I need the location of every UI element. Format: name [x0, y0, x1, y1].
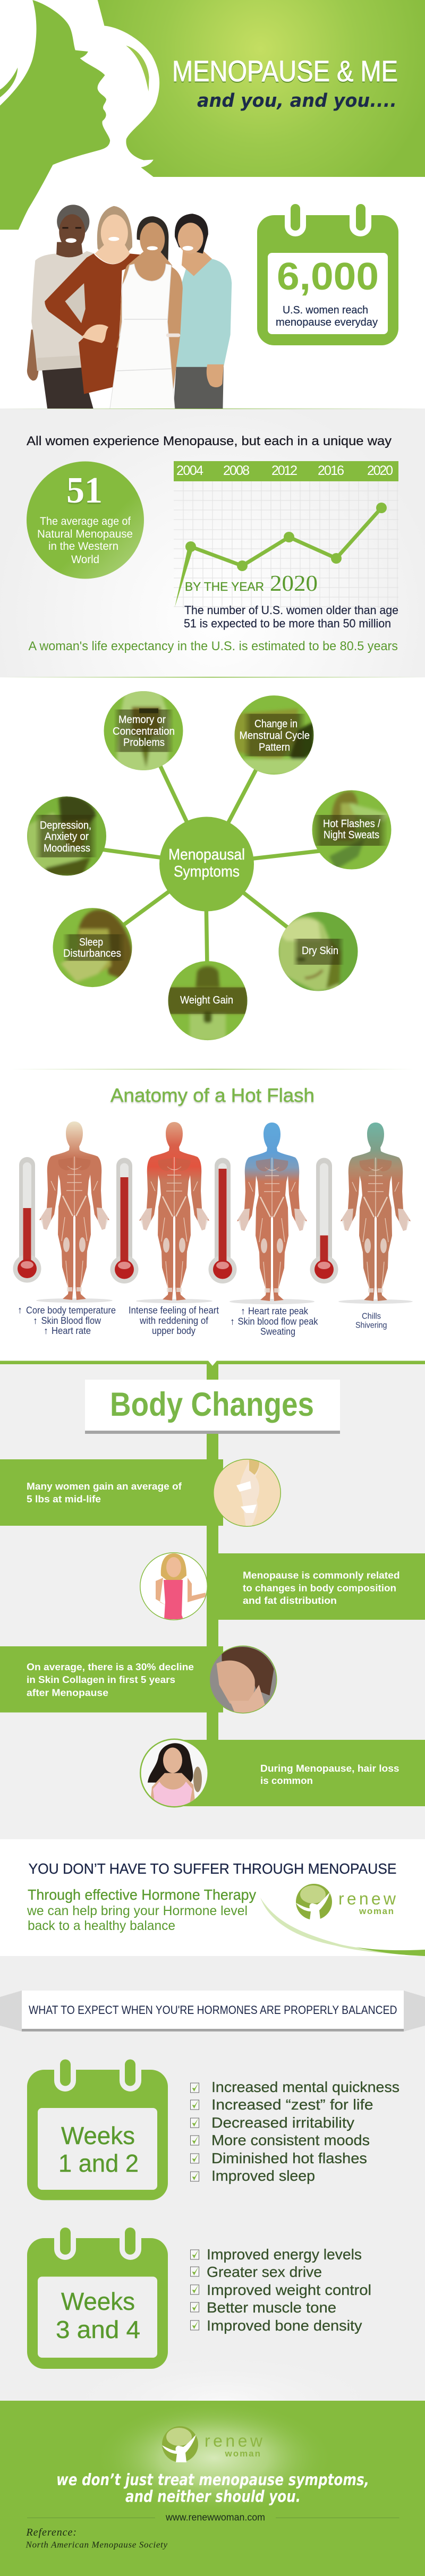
caption 3: Heart rate peak [248, 1306, 309, 1316]
checklist: weeks 3 and 4: Better muscle tone [207, 2299, 336, 2316]
change 4: hair loss [140, 1738, 425, 1807]
caption 2: with reddening of [139, 1315, 209, 1326]
closing tagline [56, 2471, 369, 2506]
panel: body changes [0, 1361, 425, 1839]
calendar: 6,000 [257, 204, 398, 345]
change 2: body composition: and fat distribution [243, 1595, 337, 1606]
caption 2: upper body [152, 1325, 196, 1336]
calendar: weeks 3 and 4: Weeks [61, 2288, 135, 2315]
white head silhouette [0, 0, 159, 177]
symptom: depression [27, 796, 106, 876]
therapy text: we can help bring your Hormone level [27, 1903, 248, 1918]
line chart [174, 461, 398, 608]
caption 3: ↑ [230, 1316, 235, 1327]
stat caption [276, 304, 378, 328]
change 3: collagen: after Menopause [27, 1687, 108, 1698]
symptom: memory: Concentration [113, 726, 175, 737]
checklist: weeks 3 and 4: Improved energy levels [207, 2246, 362, 2263]
symptom: menstrual cycle: Pattern [259, 742, 290, 753]
symptom: depression: Moodiness [44, 843, 90, 854]
heading box: Body Changes [110, 1386, 314, 1423]
symptom: depression: Anxiety or [45, 831, 89, 843]
figure 1 with thermometer [13, 1121, 109, 1300]
checklist: weeks 3 and 4 [190, 2246, 371, 2334]
heading: YOU DON’T HAVE TO SUFFER THROUGH MENOPAUSE [29, 1860, 396, 1877]
symptom: hot flashes: Night Sweats [324, 829, 379, 841]
logo: renew woman: woman [359, 1906, 394, 1916]
symptom: menstrual cycle [234, 695, 314, 775]
callout: by the year 2020: BY THE YEAR [185, 580, 264, 593]
closing tagline: and neither should you. [125, 2487, 301, 2506]
change 3: collagen: in Skin Collagen in first 5 years [27, 1674, 175, 1685]
circle: average age: Natural Menopause [37, 528, 133, 540]
change 2: body composition: to changes in body composition [243, 1583, 396, 1594]
line chart: 2004 [176, 463, 203, 478]
caption 2 [129, 1305, 219, 1336]
timeline stem [207, 1361, 218, 1740]
symptom: menstrual cycle: Menstrual Cycle [239, 730, 310, 742]
website with rules: www.renewwoman.com [165, 2512, 265, 2522]
change 4: hair loss: is common [260, 1775, 313, 1786]
symptom: dry skin: Dry Skin [302, 945, 338, 957]
reference: North American Menopause Society [26, 2539, 167, 2550]
line chart: 2020 [367, 463, 393, 478]
hub: Menopausal [168, 846, 245, 863]
footer [0, 2401, 425, 2576]
illustration: four women [27, 205, 232, 410]
hub [159, 817, 254, 912]
heading: All women experience Menopause, but each in a unique way [27, 434, 392, 448]
callout: by the year 2020: 51 is expected to be more than 50 million [184, 617, 391, 630]
symptom: memory [104, 688, 183, 773]
symptom: memory: Memory or [118, 714, 166, 726]
diagram: menopausal symptoms [27, 688, 391, 1041]
symptom: sleep: Sleep [79, 937, 103, 948]
stat number: 6,000 [277, 256, 379, 298]
symptom: weight gain: Weight Gain [180, 994, 233, 1006]
calendar: weeks 3 and 4: 3 and 4 [56, 2316, 140, 2343]
subtitle: and you, and you.... [197, 90, 397, 112]
life expectancy line: A woman's life expectancy in the U.S. is estimated to be 80.5 years [29, 639, 398, 653]
stat caption: U.S. women reach [283, 304, 368, 316]
checklist: weeks 1 and 2: Improved sleep [211, 2167, 315, 2184]
symptom: hot flashes: Hot Flashes / [323, 818, 380, 830]
logo: renew woman footer [162, 2426, 263, 2462]
swoosh [260, 1898, 425, 1956]
change 4: hair loss: During Menopause, hair loss [260, 1763, 400, 1774]
caption 2: Intense feeling of heart [129, 1305, 219, 1315]
reference [26, 2527, 167, 2550]
circle: average age: in the Western [48, 540, 118, 552]
caption 1: ↑ [33, 1315, 38, 1326]
therapy text: Through effective Hormone Therapy [28, 1886, 256, 1903]
reference: Reference: [26, 2527, 76, 2538]
heading box [85, 1380, 340, 1434]
circle: average age [27, 461, 144, 579]
ribbon heading [0, 1991, 425, 2031]
hair crescent [126, 46, 149, 91]
checklist: weeks 3 and 4: Improved weight control [207, 2282, 371, 2298]
symptom: depression: Depression, [40, 820, 91, 831]
change 3: collagen: On average, there is a 30% decline [27, 1662, 194, 1672]
calendar: weeks 1 and 2: 1 and 2 [58, 2149, 139, 2177]
symptom: dry skin [278, 912, 358, 991]
checklist: weeks 1 and 2: More consistent moods [211, 2132, 370, 2148]
woman 2 [45, 206, 144, 394]
caption 4 [355, 1312, 387, 1330]
panel: therapy message [27, 1860, 425, 1956]
circle: average age: 51 [66, 470, 103, 511]
therapy text: back to a healthy balance [28, 1918, 175, 1933]
caption 3 [230, 1306, 318, 1337]
panel: what to expect background [0, 1956, 425, 2449]
caption 1: Skin Blood flow [41, 1315, 101, 1326]
change 1: weight: Many women gain an average of [27, 1481, 182, 1492]
caption 1: Heart rate [52, 1325, 91, 1336]
calendar rings [285, 204, 371, 236]
symptom: sleep [53, 908, 132, 987]
caption 3: Skin blood flow peak [238, 1316, 318, 1327]
woman 4 [163, 214, 232, 410]
caption 1 [18, 1305, 116, 1336]
callout: by the year 2020: The number of U.S. women older than age [184, 603, 398, 617]
symptom: sleep: Disturbances [63, 948, 121, 959]
figure 4 with thermometer [310, 1123, 411, 1301]
floor shadows [36, 1298, 413, 1304]
caption 1: ↑ [44, 1325, 48, 1336]
change 3: collagen [0, 1646, 277, 1714]
symptom: memory: Problems [123, 737, 165, 749]
logo: renew woman: renew [338, 1889, 396, 1908]
change 1: weight [0, 1459, 281, 1527]
figure 3 with thermometer [208, 1123, 307, 1301]
caption 1: ↑ [18, 1305, 22, 1315]
circle: average age: World [71, 554, 99, 566]
checklist: weeks 3 and 4: Improved bone density [207, 2317, 362, 2334]
header banner [0, 0, 425, 229]
checklist: weeks 1 and 2 [190, 2079, 400, 2184]
woman 1 [27, 205, 95, 410]
checklist: weeks 1 and 2: Increased “zest” for life [211, 2096, 373, 2113]
change 1: weight: 5 lbs at mid-life [27, 1494, 101, 1504]
connector spokes [66, 730, 352, 1001]
caption 3: ↑ [241, 1306, 245, 1316]
logo: renew woman footer: renew [205, 2431, 263, 2450]
change 2: body composition [140, 1552, 425, 1620]
symptom: menstrual cycle: Change in [254, 718, 298, 730]
line chart: 2012 [271, 463, 298, 478]
logo: renew woman footer: woman [224, 2449, 260, 2459]
figure 2 with thermometer [110, 1122, 209, 1300]
logo: renew woman [296, 1884, 396, 1920]
heading: Anatomy of a Hot Flash [110, 1084, 314, 1106]
caption 4: Chills [362, 1312, 381, 1321]
callout: by the year 2020 [184, 572, 398, 630]
caption 3: Sweating [260, 1326, 295, 1337]
hub: Symptoms [174, 863, 240, 880]
symptom: weight gain [168, 961, 248, 1041]
checklist: weeks 1 and 2: Diminished hot flashes [211, 2150, 367, 2166]
checklist: weeks 1 and 2: Decreased irritability [211, 2114, 354, 2131]
green face silhouette [0, 0, 110, 229]
left crescent [0, 67, 18, 97]
calendar: weeks 1 and 2: Weeks [61, 2122, 135, 2149]
therapy text [27, 1886, 256, 1933]
caption 1: Core body temperature [26, 1305, 116, 1315]
stat caption: menopause everyday [276, 317, 378, 328]
checklist: weeks 1 and 2: Increased mental quickness [211, 2079, 400, 2095]
calendar: weeks 3 and 4 [27, 2228, 168, 2369]
checklist: weeks 3 and 4: Greater sex drive [207, 2264, 322, 2280]
line chart: 2008 [223, 463, 250, 478]
calendar: weeks 1 and 2 [27, 2059, 168, 2200]
symptom: hot flashes [312, 790, 391, 870]
callout: by the year 2020: 2020 [270, 572, 318, 596]
circle: average age: The average age of [40, 515, 131, 528]
panel: anatomy of a hot flash [11, 1069, 414, 1337]
woman 3 [110, 216, 183, 410]
caption 4: Shivering [355, 1321, 387, 1330]
line chart: 2016 [318, 463, 344, 478]
change 2: body composition: Menopause is commonly related [243, 1570, 400, 1581]
panel: statistics [0, 409, 425, 678]
